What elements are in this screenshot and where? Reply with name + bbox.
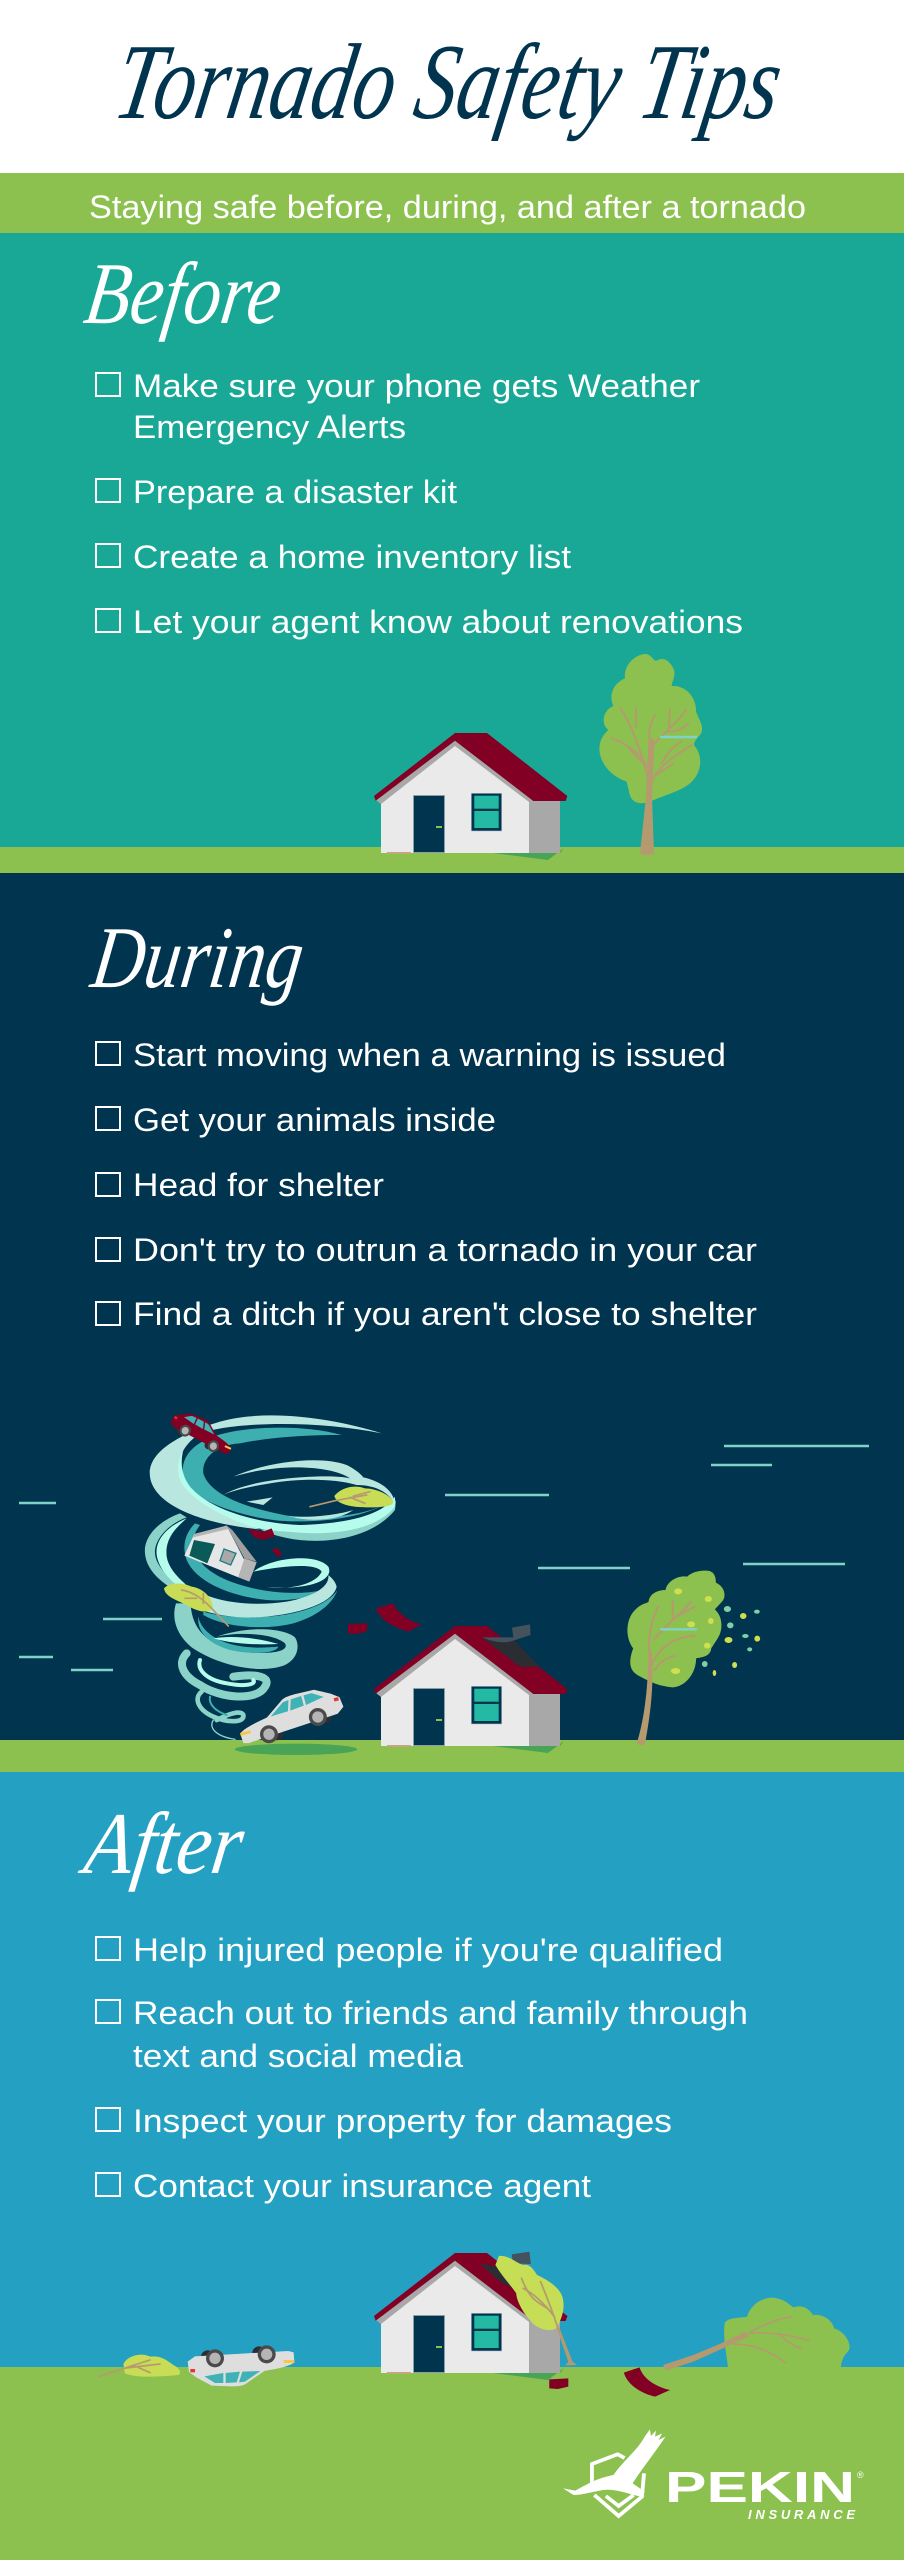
ground: during xyxy=(0,1740,904,1772)
flying house xyxy=(184,1526,257,1582)
checklist: after: Inspect your property for damages xyxy=(133,2103,672,2139)
house: damaged by tree xyxy=(374,2252,577,2380)
ground: after xyxy=(0,2367,904,2560)
checklist: before: Prepare a disaster kit xyxy=(133,474,457,510)
fallen tree xyxy=(98,2355,180,2377)
white car lifted xyxy=(234,1683,348,1750)
checklist: during: Head for shelter xyxy=(133,1167,384,1203)
overturned car xyxy=(188,2345,294,2386)
checklist: before: Let your agent know about renovations xyxy=(133,604,743,640)
car shadow xyxy=(235,1744,357,1755)
checklist: after: text and social media xyxy=(133,2038,463,2074)
heading: during: During xyxy=(85,909,310,1007)
top rings xyxy=(223,1460,395,1505)
heading: before: Before xyxy=(79,245,288,343)
lower funnel xyxy=(182,1653,267,1739)
flying roof pieces xyxy=(348,1603,422,1634)
wind streak on tree xyxy=(660,736,697,738)
checklist: after: Contact your insurance agent xyxy=(133,2168,591,2204)
registered mark: ® xyxy=(857,2470,864,2480)
flying red car xyxy=(166,1407,238,1459)
flying tree 1 xyxy=(310,1487,393,1507)
wordmark: PEKIN xyxy=(665,2463,855,2512)
wind lines xyxy=(19,1446,869,1670)
roof damage xyxy=(482,1624,540,1667)
house: intact xyxy=(374,733,567,860)
middle rings xyxy=(145,1513,187,1597)
subtitle band xyxy=(0,173,904,233)
logo: Pekin Insurance xyxy=(563,2429,864,2522)
fallen small tree and overturned car xyxy=(98,2345,294,2386)
logo mark: shield and eagle xyxy=(563,2429,666,2516)
insurance label: INSURANCE xyxy=(748,2507,855,2522)
checklist: during: Get your animals inside xyxy=(133,1102,496,1138)
tree: fallen xyxy=(663,2298,850,2371)
panel: after xyxy=(0,1772,904,2560)
checklist: before: Make sure your phone gets Weather xyxy=(133,368,700,404)
checklist: during: Find a ditch if you aren't close to shelter xyxy=(133,1296,757,1332)
checklist: during: Start moving when a warning is issued xyxy=(133,1037,726,1073)
ground: before xyxy=(0,847,904,873)
checklist: before: Emergency Alerts xyxy=(133,409,406,445)
checklist: during xyxy=(96,1037,757,1332)
tornado xyxy=(145,1407,422,1755)
checklist: after xyxy=(96,1932,748,2204)
checklist: before xyxy=(96,368,743,640)
flying tree 2 xyxy=(164,1583,228,1626)
panel: during xyxy=(0,873,904,1772)
blowing leaves xyxy=(671,1588,760,1676)
heading: after: After xyxy=(75,1795,250,1893)
checklist: before: Create a home inventory list xyxy=(133,539,571,575)
debris in funnel xyxy=(248,1528,282,1557)
checklist: after: Reach out to friends and family through xyxy=(133,1995,748,2031)
house: damaged by wind xyxy=(374,1624,567,1753)
roof damage and leaning tree xyxy=(480,2252,577,2365)
panel: before xyxy=(0,233,904,873)
tree: blown by wind xyxy=(627,1571,760,1745)
checklist: after: Help injured people if you're qualified xyxy=(133,1932,723,1968)
debris on lawn xyxy=(549,2367,670,2397)
subtitle text: Staying safe before, during, and after a tornado xyxy=(89,189,806,225)
checklist: during: Don't try to outrun a tornado in your car xyxy=(133,1232,757,1268)
header: white title band xyxy=(0,0,904,173)
tree: healthy xyxy=(599,654,702,855)
